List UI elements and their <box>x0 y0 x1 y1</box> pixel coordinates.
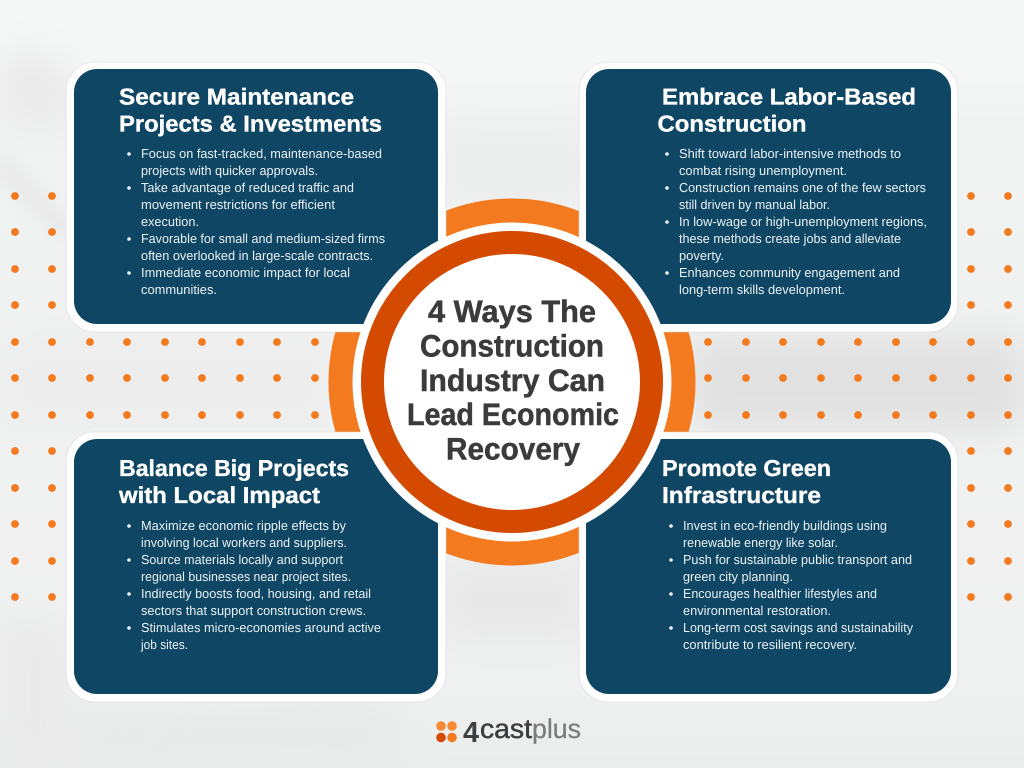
bullet list: secure maintenance: communities. <box>141 282 217 297</box>
panel: secure maintenance <box>66 62 446 332</box>
bullet list: secure maintenance: often overlooked in large-scale contracts. <box>141 248 373 263</box>
heading: green infrastructure <box>662 455 831 508</box>
title: Construction <box>420 328 604 364</box>
heading: secure maintenance <box>119 84 382 136</box>
bullet list: big projects with local impact: Indirectly boosts food, housing, and retail <box>141 586 371 601</box>
bullet list: secure maintenance <box>127 146 385 297</box>
bullet list: secure maintenance: Immediate economic impact for local <box>141 265 350 280</box>
bullet list: labor-based construction: poverty. <box>679 248 724 263</box>
bullet list: green infrastructure: Invest in eco-friendly buildings using <box>683 518 887 533</box>
bullet list: big projects with local impact: Maximize economic ripple effects by <box>141 518 346 533</box>
bullet list: labor-based construction: In low-wage or high-unemployment regions, <box>679 214 927 229</box>
heading: green infrastructure: Infrastructure <box>662 482 821 508</box>
decorative dot grid, right <box>704 192 1012 601</box>
bullet list: green infrastructure: renewable energy like solar. <box>683 535 838 550</box>
bullet list: labor-based construction: Shift toward labor-intensive methods to <box>679 146 901 161</box>
heading: big projects with local impact: with Local Impact <box>118 482 320 508</box>
heading: secure maintenance: Secure Maintenance <box>119 84 354 110</box>
bullet list: big projects with local impact: regional businesses near project sites. <box>141 569 351 584</box>
bullet list: green infrastructure: environmental restoration. <box>683 603 831 618</box>
bullet list: labor-based construction: these methods create jobs and alleviate <box>679 231 901 246</box>
heading: big projects with local impact: Balance Big Projects <box>119 455 349 481</box>
panel: green infrastructure <box>579 432 958 702</box>
heading: big projects with local impact <box>118 455 349 508</box>
bullet list: big projects with local impact <box>127 518 381 652</box>
outer orange ring behind cards <box>341 211 683 553</box>
bullet list: secure maintenance: projects with quicker approvals. <box>141 163 318 178</box>
central circle <box>352 222 672 542</box>
bullet list: secure maintenance: Favorable for small and medium-sized firms <box>141 231 385 246</box>
bullet list: green infrastructure: Push for sustainable public transport and <box>683 552 912 567</box>
wordmark <box>463 714 581 749</box>
heading: secure maintenance: Projects & Investments <box>119 110 382 136</box>
heading: labor-based construction <box>658 84 916 136</box>
bullet list: big projects with local impact: Source materials locally and support <box>141 552 343 567</box>
bullet list: green infrastructure: Long-term cost savings and sustainability <box>683 620 913 635</box>
bullet list: big projects with local impact: involving local workers and suppliers. <box>141 535 347 550</box>
wordmark: plus <box>532 714 581 744</box>
bullet list: secure maintenance: Take advantage of reduced traffic and <box>141 180 354 195</box>
logo: 4castplus <box>436 714 581 749</box>
title: Industry Can <box>420 363 605 398</box>
wordmark: 4 <box>463 717 479 749</box>
icon: four dots <box>436 721 457 742</box>
panel: big projects with local impact <box>66 432 446 702</box>
bullet list: secure maintenance: execution. <box>141 214 199 229</box>
bullet list: secure maintenance: Focus on fast-tracked, maintenance-based <box>141 146 382 161</box>
bullet list: labor-based construction: combat rising unemployment. <box>679 163 847 178</box>
title: 4 Ways The <box>428 294 596 329</box>
bullet list: green infrastructure: green city planning. <box>683 569 793 584</box>
bullet list: labor-based construction: still driven by manual labor. <box>679 197 830 212</box>
bullet list: labor-based construction: long-term skills development. <box>679 282 845 297</box>
title: Lead Economic <box>407 397 619 432</box>
bullet list: secure maintenance: movement restrictions for efficient <box>141 197 335 212</box>
decorative dot grid, left <box>11 192 319 601</box>
title <box>407 294 619 466</box>
title: Recovery <box>446 432 581 466</box>
bullet list: labor-based construction: Construction remains one of the few sectors <box>679 180 926 195</box>
wordmark: cast <box>480 714 533 744</box>
panel: labor-based construction <box>579 62 958 332</box>
heading: green infrastructure: Promote Green <box>662 455 831 481</box>
bullet list: labor-based construction <box>665 146 927 297</box>
bullet list: labor-based construction: Enhances community engagement and <box>679 265 900 280</box>
bullet list: green infrastructure <box>669 518 913 652</box>
bullet list: green infrastructure: contribute to resilient recovery. <box>683 637 857 652</box>
bullet list: big projects with local impact: sectors that support construction crews. <box>141 603 366 618</box>
heading: labor-based construction: Construction <box>658 110 806 136</box>
heading: labor-based construction: Embrace Labor-Based <box>662 84 916 110</box>
bullet list: green infrastructure: Encourages healthier lifestyles and <box>683 586 877 601</box>
bullet list: big projects with local impact: job sites. <box>140 637 188 652</box>
bullet list: big projects with local impact: Stimulates micro-economies around active <box>141 620 381 635</box>
